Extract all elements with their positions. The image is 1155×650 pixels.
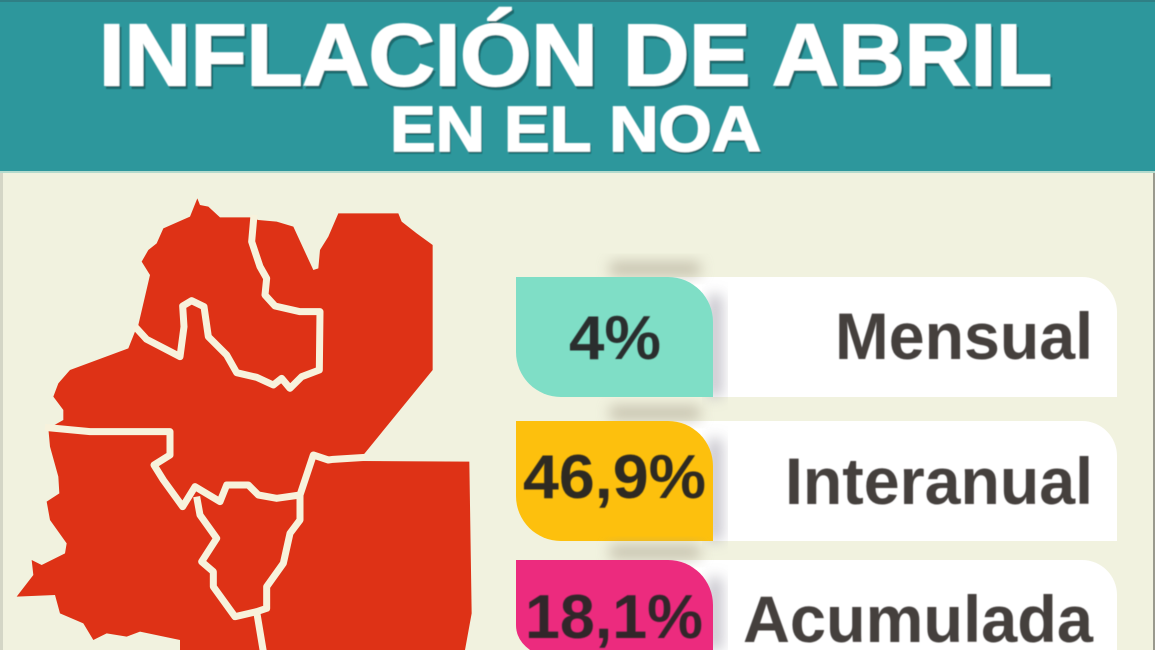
subtitle: EN EL NOA (391, 95, 762, 167)
title: INFLACIÓN DE ABRIL (101, 10, 1054, 107)
row: Mensual (516, 262, 1117, 397)
map silhouette (17, 198, 472, 650)
province borders (45, 215, 365, 650)
label: Mensual: Mensual (835, 299, 1093, 373)
value: 46,9%: 46,9% (523, 443, 706, 512)
row: Acumulada (516, 545, 1117, 650)
map of NOA provinces (17, 198, 472, 650)
label: Interanual: Interanual (785, 444, 1093, 518)
row: Interanual (516, 406, 1117, 541)
chip: 4% (516, 277, 713, 397)
chip: 46,9% (516, 421, 713, 541)
chip: 18,1% (516, 560, 713, 650)
subtitle: EN EL NOA (390, 93, 761, 165)
value: 4%: 4% (569, 304, 661, 373)
title: INFLACIÓN DE ABRIL (99, 7, 1052, 104)
header banner (0, 0, 1155, 173)
value: 18,1%: 18,1% (525, 583, 703, 650)
